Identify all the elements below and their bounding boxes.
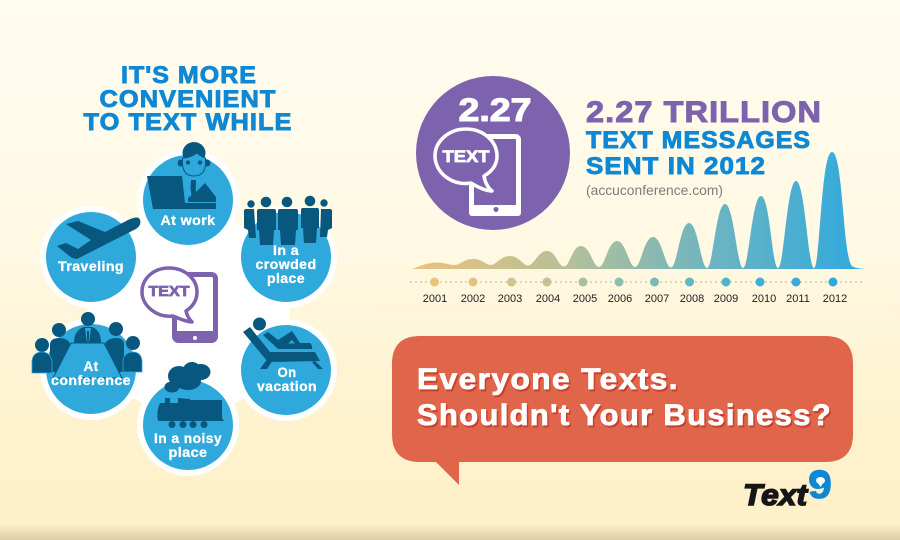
chart: wave of messages per year xyxy=(410,152,866,305)
circle: in a crowded place xyxy=(235,196,337,308)
heading: 2.27 trillion text messages xyxy=(586,96,822,180)
heading: 2.27 trillion text messages: 2.27 TRILLION xyxy=(586,96,822,129)
label: at conference xyxy=(51,359,131,388)
circle: traveling xyxy=(40,206,142,308)
callout: everyone texts speech bubble: Shouldn't Your Business? xyxy=(418,401,834,434)
label: traveling: Traveling xyxy=(58,259,124,274)
timeline year labels: 2003 xyxy=(498,293,522,305)
timeline year labels: 2004 xyxy=(536,293,560,305)
panel: situations wheel xyxy=(32,142,337,476)
label: in a crowded place: crowded xyxy=(256,257,316,272)
icon: steam train xyxy=(157,362,224,428)
source note: (accuconference.com) xyxy=(586,183,723,198)
callout: everyone texts speech bubble: Shouldn't Your Business? xyxy=(417,399,832,432)
timeline year labels xyxy=(423,293,847,305)
heading: it's more convenient: IT'S MORE xyxy=(121,62,257,89)
label: in a noisy place: place xyxy=(168,445,208,460)
icon: conference table xyxy=(32,312,142,378)
timeline year labels: 2012 xyxy=(823,293,847,305)
timeline: dotted axis xyxy=(410,281,865,283)
heading: it's more convenient xyxy=(84,62,292,136)
label: at conference: At xyxy=(84,359,99,374)
timeline year labels: 2006 xyxy=(608,293,632,305)
icon: center phone with text bubble xyxy=(142,268,216,341)
heading: 2.27 trillion text messages: TEXT MESSAGES xyxy=(586,127,811,154)
timeline year labels: 2007 xyxy=(645,293,669,305)
label: in a crowded place xyxy=(256,243,316,286)
icon: white phone with speech bubble: TEXT xyxy=(442,147,490,166)
timeline dots xyxy=(430,278,838,286)
timeline year labels: 2011 xyxy=(786,293,810,305)
icon: airplane xyxy=(57,218,140,259)
stat badge: 2.27 purple circle xyxy=(416,76,570,230)
label: on vacation: On xyxy=(278,365,296,380)
circle: at work xyxy=(137,142,239,251)
callout: everyone texts speech bubble: Everyone Texts. xyxy=(418,365,680,398)
circle: at conference xyxy=(32,312,142,420)
timeline year labels: 2010 xyxy=(752,293,776,305)
timeline year labels: 2001 xyxy=(423,293,447,305)
icon: crowd of people xyxy=(244,196,332,245)
logo: Text9 xyxy=(743,463,832,512)
timeline year labels: 2005 xyxy=(573,293,597,305)
logo: Text9: Text xyxy=(743,479,809,512)
logo: Text9: 9 xyxy=(808,463,832,507)
timeline year labels: 2009 xyxy=(714,293,738,305)
label: in a crowded place: In a xyxy=(273,243,299,258)
label: in a noisy place: In a noisy xyxy=(154,431,222,446)
label: on vacation xyxy=(257,365,317,394)
label: in a crowded place: place xyxy=(267,271,305,286)
heading: 2.27 trillion text messages: SENT IN 2012 xyxy=(586,153,766,180)
callout: everyone texts speech bubble: Everyone Texts. xyxy=(417,363,679,396)
icon: man at laptop xyxy=(147,142,216,209)
stat badge: 2.27 purple circle: 2.27 xyxy=(458,92,532,128)
heading: it's more convenient: TO TEXT WHILE xyxy=(84,109,292,136)
circle: on vacation xyxy=(235,318,337,421)
label: at work: At work xyxy=(160,213,216,228)
icon: white phone with speech bubble xyxy=(435,129,521,216)
heading: it's more convenient: CONVENIENT xyxy=(100,86,276,113)
label: at conference: conference xyxy=(51,373,131,388)
timeline year labels: 2002 xyxy=(461,293,485,305)
icon: person on lounge chair xyxy=(243,318,323,369)
circle: in a noisy place xyxy=(137,362,239,476)
icon: center phone with text bubble: TEXT xyxy=(148,283,190,300)
callout: everyone texts speech bubble xyxy=(392,336,853,485)
label: on vacation: vacation xyxy=(257,379,317,394)
label: in a noisy place xyxy=(154,431,222,460)
timeline year labels: 2008 xyxy=(680,293,704,305)
